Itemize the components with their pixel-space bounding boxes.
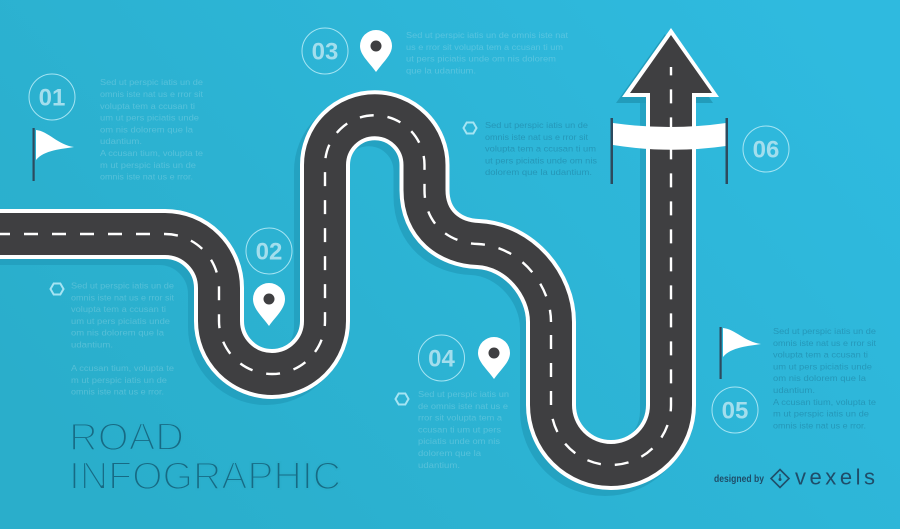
text block 03: ut pers piciatis unde om nis dolorem [406,54,556,64]
text block 04: de omnis iste nat us e [418,401,508,411]
text block 04: dolorem que la [418,448,481,458]
text block 05: Sed ut perspic iatis un de [773,326,876,336]
text block 05: volupta tem a ccusan ti [773,350,868,360]
icon: pin 3 [360,30,392,72]
icon: flag 1 [32,128,74,181]
text block 05: m ut perspic iatis un de [773,409,869,419]
text block 03: que la udantium. [406,65,476,75]
text block 01: udantium. [100,136,142,146]
text block 01: omnis iste nat us e rror sit [100,89,204,99]
number 02: 02 [256,238,282,266]
text block 01 [100,77,204,182]
icon: flag 2 [720,327,761,379]
text block 05: um ut pers piciatis unde [773,361,872,371]
text block 01: om nis dolorem que la [100,124,193,134]
number 03: 03 [312,38,338,66]
title: INFOGRAPHIC [69,455,341,498]
text block 05: A ccusan tium, volupta te [773,397,876,407]
number 04 [418,335,464,381]
designed by vexels logo [714,464,875,490]
number 06 [743,126,789,172]
icon: pin 4 [478,337,510,379]
text block 05 [773,326,877,430]
icon: hexagon 2 [50,284,64,294]
text block 03b: omnis iste nat us e rror sit [485,132,589,142]
text block 03b: volupta tem a ccusan ti um [485,144,596,154]
designed by vexels logo: vexels [795,464,875,490]
text block 04: udantium. [418,460,460,470]
text block 04 [418,389,509,470]
text block 03 [406,30,569,75]
title [69,416,341,498]
text block 03: Sed ut perspic iatis un de omnis iste nat [406,30,569,40]
text block 02: A ccusan tium, volupta te [71,363,174,373]
text block 04: rror sit volupta tem a [418,413,502,423]
number 02 [246,228,292,274]
text block 01: Sed ut perspic iatis un de [100,77,203,87]
text block 04: Sed ut perspic iatis un [418,389,509,399]
text block 03b: Sed ut perspic iatis un de [485,120,588,130]
banner across the arrow [610,118,728,184]
icon: pin 2 [253,283,285,326]
road shadow [0,34,713,471]
number 05: 05 [722,398,748,424]
text block 02 [71,280,175,397]
text block 03b: dolorem que la udantium. [485,167,592,177]
title: ROAD [69,416,184,459]
number 05 [712,387,758,433]
text block 03b: ut pers piciatis unde om nis [485,155,597,165]
text block 01: A ccusan tium, volupta te [100,148,203,158]
designed by vexels logo: designed by [714,473,764,485]
text block 05: omnis iste nat us e rror sit [773,338,877,348]
text block 04: piciatis unde om nis [418,436,500,446]
text block 05: om nis dolorem que la [773,373,866,383]
text block 02: om nis dolorem que la [71,328,164,338]
number 04: 04 [428,346,455,372]
number 06: 06 [753,136,779,164]
text block 01: um ut pers piciatis unde [100,113,199,123]
text block 03b [485,120,597,177]
text block 03: us e rror sit volupta tem a ccusan ti um [406,42,563,52]
text block 01: volupta tem a ccusan ti [100,101,195,111]
text block 01: m ut perspic iatis un de [100,160,196,170]
text block 05: omnis iste nat us e rror. [773,420,866,430]
number 01: 01 [39,84,65,112]
number 03 [302,28,348,74]
number 01 [29,74,75,120]
text block 02: volupta tem a ccusan ti [71,304,166,314]
text block 02: omnis iste nat us e rror. [71,387,164,397]
text block 02: um ut pers piciatis unde [71,316,170,326]
text block 02: omnis iste nat us e rror sit [71,292,175,302]
text block 02: m ut perspic iatis un de [71,375,167,385]
text block 02: udantium. [71,340,113,350]
text block 02: Sed ut perspic iatis un de [71,280,174,290]
text block 05: udantium. [773,385,815,395]
road [0,28,719,465]
text block 01: omnis iste nat us e rror. [100,172,193,182]
icon: hexagon 3 [464,122,476,134]
text block 04: ccusan ti um ut pers [418,424,501,434]
icon: hexagon 4 [396,394,408,404]
